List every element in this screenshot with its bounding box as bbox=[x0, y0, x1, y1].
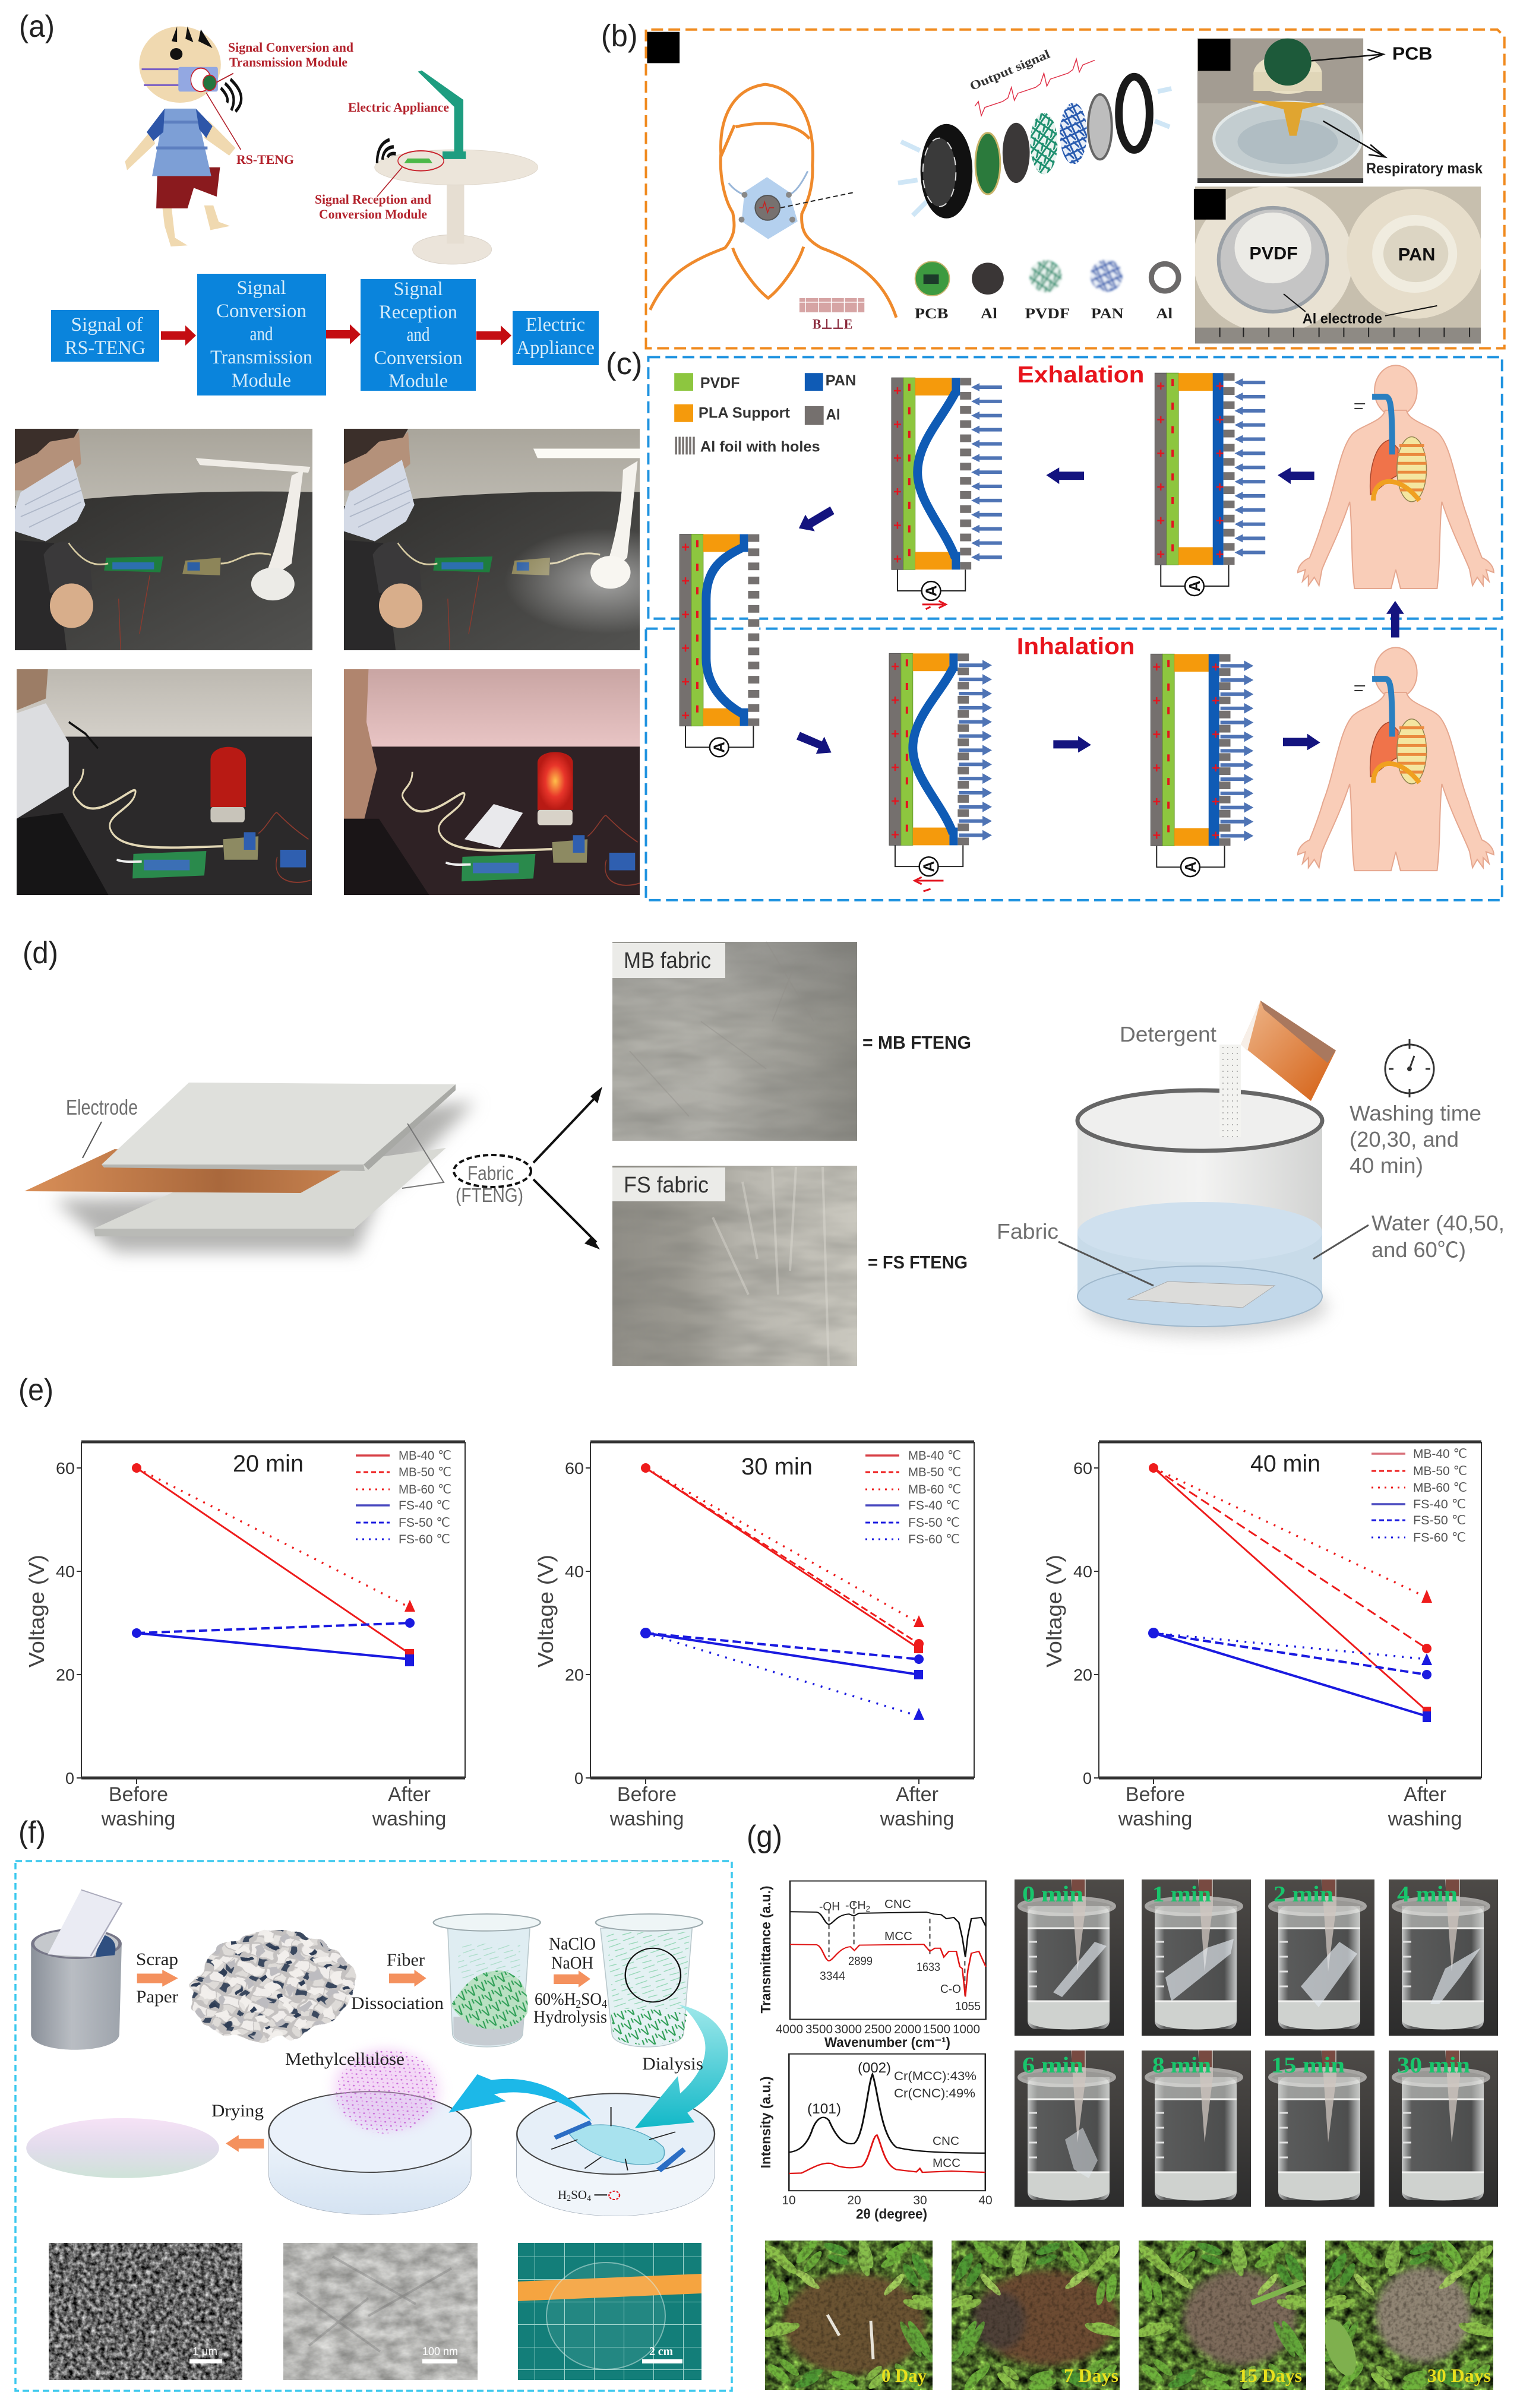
soil photo: 7 days bbox=[952, 2241, 1120, 2390]
washing time label: Washing time bbox=[1350, 1101, 1481, 1125]
photo: lamp off with mask bbox=[15, 429, 312, 650]
person outline with mask bbox=[650, 84, 896, 318]
SEM image: 1 μm bbox=[192, 2346, 217, 2358]
chart: 20 min: Before bbox=[109, 1783, 168, 1806]
chart legend bbox=[865, 1449, 961, 1546]
chart legend bbox=[356, 1449, 451, 1546]
exploded device view bbox=[898, 47, 1171, 219]
chart: 30 min: washing bbox=[880, 1808, 954, 1830]
chart legend: MB-40 ℃ bbox=[1413, 1447, 1467, 1461]
panel label e: (e) bbox=[18, 1373, 53, 1407]
process labels: Fiber bbox=[387, 1950, 425, 1970]
red module labels: Signal Conversion and bbox=[228, 40, 353, 55]
component legend: Al bbox=[1156, 306, 1173, 322]
FTIR chart: 4000 bbox=[776, 2023, 803, 2036]
chart legend: MB-50 ℃ bbox=[399, 1466, 451, 1479]
MB FTENG label: = MB FTENG bbox=[862, 1032, 971, 1053]
red module labels bbox=[228, 40, 449, 222]
university logo bbox=[799, 298, 864, 332]
process labels: Paper bbox=[136, 1987, 178, 2007]
panel d: fabric TENG and washing bbox=[23, 936, 1505, 1366]
fabric callout ellipse bbox=[454, 1155, 531, 1206]
chart: 40 min: 40 min bbox=[1250, 1451, 1320, 1477]
red module labels: Conversion Module bbox=[319, 207, 427, 222]
detergent label: Detergent bbox=[1120, 1022, 1216, 1046]
FTIR chart: -CH bbox=[845, 1899, 867, 1912]
process labels: Scrap bbox=[136, 1950, 178, 1969]
XRD chart: (002) bbox=[858, 2060, 891, 2076]
flow box: signal conversion and transmission module: Conversion bbox=[216, 300, 306, 322]
FTIR chart: 1500 bbox=[923, 2023, 950, 2036]
transparent film photo bbox=[518, 2243, 701, 2380]
process labels: 2 bbox=[576, 1998, 581, 2011]
flow box: signal reception and conversion module: Conversion bbox=[374, 347, 462, 369]
FTIR chart: 2 bbox=[865, 1904, 870, 1913]
XRD chart: 20 bbox=[847, 2194, 861, 2207]
chart: 20 min: After bbox=[388, 1783, 431, 1806]
chart: 20 min: washing bbox=[101, 1808, 175, 1830]
device: exhalation flat state bbox=[1155, 373, 1265, 596]
flow box: signal conversion and transmission module: Transmission bbox=[210, 347, 312, 368]
FS fabric photo bbox=[612, 1166, 857, 1366]
chart legend: MB-40 ℃ bbox=[908, 1449, 961, 1463]
device: exhalation deforming state: A bbox=[924, 586, 940, 596]
device: inhalation deforming state bbox=[889, 653, 992, 891]
flow box: signal reception and conversion module: Signal bbox=[393, 279, 443, 300]
orange dashed frame bbox=[646, 30, 1505, 349]
FTIR chart: CNC bbox=[884, 1898, 911, 1911]
soil photo: 30 days: 30 Days bbox=[1427, 2365, 1491, 2386]
panel b: respiratory mask TENG structure bbox=[601, 18, 1505, 349]
chart legend: MB-60 ℃ bbox=[399, 1483, 451, 1496]
component legend bbox=[915, 260, 1178, 322]
black redaction square bbox=[647, 32, 680, 63]
beaker photo: 8 min: 8 min bbox=[1152, 2053, 1211, 2078]
photo: PCB on respiratory mask bbox=[1197, 38, 1364, 183]
red module labels: Signal Reception and bbox=[315, 192, 431, 207]
chart: 20 min: 20 min bbox=[233, 1451, 304, 1477]
PCB and mask callouts: Respiratory mask bbox=[1366, 161, 1483, 177]
FTIR chart: 2500 bbox=[864, 2023, 892, 2036]
flow box: electric appliance: Electric bbox=[526, 314, 585, 336]
panel label b: (b) bbox=[601, 18, 638, 53]
device: exhalation flat state: A bbox=[1187, 581, 1203, 591]
output signal bbox=[968, 47, 1095, 116]
device: fully separated state bbox=[680, 534, 759, 757]
component legend: PCB bbox=[915, 306, 948, 322]
FTIR chart: 1633 bbox=[917, 1961, 940, 1974]
cartoon child wearing mask bbox=[125, 26, 241, 246]
flow box: electric appliance bbox=[513, 311, 599, 365]
inhalation heading: Inhalation bbox=[1017, 634, 1135, 659]
chart: 20 min: 20 bbox=[56, 1666, 75, 1684]
blue dashed frame: exhalation bbox=[648, 357, 1502, 619]
fabric label in beaker: Fabric bbox=[997, 1219, 1058, 1243]
panel label a: (a) bbox=[19, 10, 55, 44]
flow box: signal reception and conversion module: Reception bbox=[379, 302, 457, 323]
XRD chart: 2θ (degree) bbox=[856, 2206, 927, 2222]
water label: and 60℃) bbox=[1372, 1238, 1466, 1262]
process labels: NaOH bbox=[551, 1953, 593, 1973]
red module labels: Transmission Module bbox=[229, 55, 347, 69]
flow box: signal of RS-TENG: Signal of bbox=[71, 314, 143, 336]
blue dashed frame: inhalation bbox=[646, 629, 1502, 900]
orange process arrows bbox=[137, 1970, 590, 2152]
table with lamp and receiver bbox=[375, 71, 538, 264]
black redaction square bbox=[1194, 189, 1226, 220]
beaker photo: 6 min: 6 min bbox=[1022, 2053, 1083, 2078]
chart: 40 min: After bbox=[1404, 1783, 1446, 1806]
flow box: signal conversion and transmission module: Signal bbox=[236, 277, 286, 299]
university logo: B⊥⊥E bbox=[813, 317, 852, 332]
chart: 30 min: Before bbox=[617, 1783, 677, 1806]
FTIR chart: 2000 bbox=[894, 2023, 921, 2036]
beaker photo: 2 min: 2 min bbox=[1273, 1882, 1333, 1907]
soil photo: 30 days bbox=[1325, 2241, 1493, 2390]
FS fabric photo: FS fabric bbox=[624, 1173, 709, 1198]
beaker photo: 30 min bbox=[1389, 2051, 1498, 2207]
device: inhalation deforming state: A bbox=[921, 861, 938, 872]
panel label f: (f) bbox=[18, 1815, 46, 1850]
FTENG layered sheets bbox=[24, 1083, 475, 1252]
beaker photo: 8 min bbox=[1142, 2051, 1251, 2207]
beaker photo: 6 min bbox=[1015, 2051, 1124, 2207]
process labels: Dissociation bbox=[351, 1994, 444, 2013]
chart legend bbox=[1372, 1447, 1467, 1545]
FTIR chart: 1055 bbox=[955, 2000, 981, 2013]
panel label d: (d) bbox=[23, 936, 58, 970]
cyan curved arrow to dialysis bbox=[635, 2004, 728, 2128]
chart legend: FS-40 ℃ bbox=[1413, 1498, 1466, 1511]
water label bbox=[1313, 1211, 1505, 1262]
chart: 30 min: 20 bbox=[565, 1666, 584, 1684]
material legend bbox=[674, 373, 856, 455]
washing beaker bbox=[1077, 1090, 1328, 1336]
arrow bbox=[326, 324, 361, 344]
chart legend: FS-50 ℃ bbox=[1413, 1514, 1466, 1527]
human body: exhalation bbox=[1298, 365, 1494, 588]
chart legend: MB-50 ℃ bbox=[908, 1466, 961, 1479]
fabric callout ellipse: Fabric bbox=[467, 1162, 514, 1184]
dish with methylcellulose bbox=[268, 2035, 471, 2214]
beaker with fibers bbox=[434, 1914, 541, 2047]
electrode callouts: Al electrode bbox=[1303, 311, 1382, 327]
beaker with hydrolysed fibers bbox=[596, 1914, 703, 2047]
arrow bbox=[161, 325, 196, 346]
chart legend: FS-50 ℃ bbox=[908, 1516, 960, 1530]
device: inhalation flat state bbox=[1151, 654, 1253, 877]
chart: 40 min: Before bbox=[1126, 1783, 1185, 1806]
chart legend: FS-60 ℃ bbox=[399, 1533, 450, 1546]
soil photo: 7 days: 7 Days bbox=[1064, 2365, 1118, 2386]
fabric label in beaker bbox=[997, 1219, 1154, 1286]
material legend: Al bbox=[826, 407, 840, 423]
chart: 20 min: Voltage (V) bbox=[24, 1555, 49, 1667]
device: exhalation deforming state bbox=[892, 378, 1002, 609]
flow box: signal conversion and transmission module: Module bbox=[232, 370, 291, 391]
flow box: signal of RS-TENG bbox=[51, 310, 159, 362]
material legend: Al foil with holes bbox=[700, 439, 820, 455]
soil photo: 0 day: 0 Day bbox=[881, 2365, 927, 2386]
beaker photo: 30 min: 30 min bbox=[1397, 2053, 1470, 2078]
beaker photo: 1 min: 1 min bbox=[1152, 1882, 1211, 1907]
process arrows bbox=[797, 467, 1404, 754]
material legend: PLA Support bbox=[699, 406, 790, 422]
chart legend: FS-60 ℃ bbox=[1413, 1531, 1466, 1545]
process labels: 2 bbox=[567, 2194, 571, 2203]
beaker photo: 4 min bbox=[1389, 1879, 1498, 2036]
device: fully separated state: A bbox=[712, 742, 728, 753]
photo: beacon on without mask bbox=[344, 669, 640, 895]
process labels: Dialysis bbox=[642, 2054, 703, 2074]
beaker photo: 0 min: 0 min bbox=[1022, 1882, 1083, 1907]
red module labels: RS-TENG bbox=[236, 152, 294, 167]
PCB and mask callouts: PCB bbox=[1392, 43, 1432, 64]
XRD chart: 30 bbox=[913, 2194, 927, 2207]
XRD chart: Cr(CNC):49% bbox=[894, 2087, 975, 2100]
chart legend: FS-40 ℃ bbox=[399, 1499, 450, 1512]
FTIR chart: 2899 bbox=[848, 1955, 873, 1968]
process labels bbox=[136, 1934, 703, 2203]
panel label c: (c) bbox=[606, 346, 643, 381]
beaker photo: 15 min bbox=[1265, 2051, 1374, 2207]
chart: 30 min: 60 bbox=[565, 1459, 584, 1477]
flow box: signal reception and conversion module: Module bbox=[388, 371, 448, 392]
chart: 30 min: After bbox=[896, 1783, 938, 1806]
material legend: PAN bbox=[826, 373, 856, 389]
chart legend: FS-50 ℃ bbox=[399, 1516, 450, 1530]
flow box: signal reception and conversion module: and bbox=[406, 324, 430, 346]
transparent film photo: 2 cm bbox=[649, 2345, 673, 2358]
chart: 40 min: 20 bbox=[1073, 1666, 1092, 1684]
process labels: 60%H bbox=[535, 1989, 580, 2009]
electrode callouts: PVDF bbox=[1249, 243, 1298, 263]
black redaction square bbox=[1198, 39, 1231, 71]
chart: 40 min: washing bbox=[1118, 1808, 1192, 1830]
output signal: Output signal bbox=[968, 47, 1052, 93]
FTIR chart: 3500 bbox=[805, 2023, 833, 2036]
chart: 20 min: washing bbox=[372, 1808, 446, 1830]
exhalation heading: Exhalation bbox=[1017, 362, 1144, 388]
panel c: exhalation and inhalation mechanism bbox=[606, 346, 1502, 900]
XRD chart: MCC bbox=[933, 2157, 960, 2170]
FTIR chart: 3344 bbox=[820, 1970, 845, 1983]
XRD chart: CNC bbox=[933, 2135, 959, 2148]
arrow bbox=[476, 325, 511, 346]
chart legend: FS-60 ℃ bbox=[908, 1533, 960, 1546]
chart: 20 min bbox=[24, 1442, 465, 1830]
SEM image bbox=[49, 2243, 242, 2380]
beaker photo: 15 min: 15 min bbox=[1271, 2053, 1345, 2078]
paper flakes pile bbox=[191, 1930, 353, 2040]
chart: 40 min: Voltage (V) bbox=[1042, 1555, 1066, 1667]
FTIR chart: MCC bbox=[884, 1930, 912, 1943]
XRD chart: Cr(MCC):43% bbox=[894, 2070, 977, 2083]
electrode callouts bbox=[1249, 243, 1437, 327]
XRD chart: (101) bbox=[807, 2101, 841, 2117]
beaker photo: 1 min bbox=[1142, 1879, 1251, 2036]
FTIR chart: C-O bbox=[940, 1983, 961, 1996]
process labels: NaClO bbox=[549, 1934, 596, 1954]
chart: 30 min: washing bbox=[609, 1808, 684, 1830]
chart: 20 min: 40 bbox=[56, 1562, 75, 1581]
water label: Water (40,50, bbox=[1372, 1211, 1505, 1235]
TEM image bbox=[283, 2243, 478, 2380]
soil photo: 15 days: 15 Days bbox=[1238, 2365, 1302, 2386]
electrode label: Electrode bbox=[66, 1095, 138, 1119]
FTIR chart: Transmittance (a.u.) bbox=[758, 1886, 773, 2013]
chart legend: MB-60 ℃ bbox=[908, 1483, 961, 1496]
TEM image: 100 nm bbox=[422, 2346, 458, 2358]
process labels: Drying bbox=[211, 2101, 264, 2121]
panel f: scrap paper to cellulose film bbox=[15, 1815, 732, 2391]
chart: 30 min: 40 bbox=[565, 1562, 584, 1581]
flow box: signal reception and conversion module bbox=[361, 279, 476, 392]
FTIR chart: Wavenumber (cm⁻¹) bbox=[824, 2034, 950, 2050]
process labels: Methylcellulose bbox=[285, 2049, 405, 2069]
chart legend: MB-50 ℃ bbox=[1413, 1464, 1467, 1478]
beaker photo: 4 min: 4 min bbox=[1397, 1882, 1458, 1907]
chart: 40 min: 60 bbox=[1073, 1459, 1092, 1477]
flow box: signal conversion and transmission module: and bbox=[249, 324, 273, 345]
cyan dashed frame bbox=[15, 1861, 732, 2391]
component legend: PVDF bbox=[1025, 306, 1070, 322]
scrap paper cup bbox=[31, 1890, 122, 2050]
process labels: SO bbox=[581, 1989, 602, 2009]
panel label g: (g) bbox=[747, 1820, 782, 1854]
fabric callout ellipse: (FTENG) bbox=[456, 1184, 523, 1206]
FTIR chart: 1000 bbox=[953, 2023, 980, 2036]
detergent box and powder bbox=[1219, 1001, 1336, 1137]
component legend: PAN bbox=[1091, 306, 1124, 322]
process labels: 4 bbox=[602, 1998, 607, 2011]
chart: 40 min: 0 bbox=[1083, 1769, 1092, 1787]
chart: 30 min bbox=[533, 1442, 974, 1830]
FTIR chart: -OH bbox=[819, 1900, 840, 1913]
PCB and mask callouts bbox=[1312, 43, 1483, 177]
photo: PVDF and PAN electrodes bbox=[1195, 186, 1481, 343]
XRD chart: 40 bbox=[978, 2194, 993, 2207]
soil photo: 0 day bbox=[765, 2241, 933, 2390]
stopwatch icon bbox=[1385, 1039, 1434, 1097]
photo: beacon off with mask bbox=[17, 669, 312, 895]
FS FTENG label: = FS FTENG bbox=[868, 1252, 968, 1273]
dried film bbox=[26, 2118, 219, 2178]
chart legend: MB-60 ℃ bbox=[1413, 1481, 1467, 1495]
flow box: electric appliance: Appliance bbox=[516, 337, 595, 359]
washing time label: (20,30, and bbox=[1350, 1127, 1459, 1151]
process labels: SO bbox=[571, 2188, 587, 2202]
arrows to fabrics bbox=[533, 1087, 602, 1249]
chart: 20 min: 0 bbox=[65, 1769, 74, 1787]
MB fabric photo: MB fabric bbox=[624, 948, 711, 973]
washing time label: 40 min) bbox=[1350, 1153, 1423, 1178]
beaker photo: 0 min bbox=[1015, 1879, 1124, 2036]
chart: 30 min: 0 bbox=[574, 1769, 583, 1787]
human body: inhalation bbox=[1298, 647, 1494, 871]
XRD chart: 10 bbox=[782, 2194, 796, 2207]
chart: 20 min: 60 bbox=[56, 1459, 75, 1477]
FTIR chart: 3000 bbox=[835, 2023, 862, 2036]
device: inhalation flat state: A bbox=[1183, 862, 1199, 873]
process illustration bbox=[26, 1890, 728, 2216]
component legend: Al bbox=[981, 306, 997, 322]
dialysis dish bbox=[516, 2093, 715, 2216]
electrode callouts: PAN bbox=[1398, 245, 1435, 264]
electrode label bbox=[66, 1095, 138, 1158]
panel g: cellulose film characterisation and degradation bbox=[747, 1820, 1498, 2393]
FTIR chart bbox=[758, 1881, 986, 2050]
chart: 40 min bbox=[1042, 1442, 1481, 1830]
panel e: voltage before and after washing bbox=[18, 1373, 1481, 1830]
red module labels: Electric Appliance bbox=[348, 100, 449, 115]
soil photo: 15 days bbox=[1139, 2241, 1306, 2390]
material legend: PVDF bbox=[700, 375, 740, 391]
MB fabric photo bbox=[612, 942, 857, 1141]
XRD chart bbox=[758, 2054, 993, 2222]
chart legend: MB-40 ℃ bbox=[399, 1449, 451, 1463]
chart legend: FS-40 ℃ bbox=[908, 1499, 960, 1512]
process labels: 4 bbox=[587, 2194, 591, 2203]
photo: lamp on with mask bbox=[344, 429, 640, 650]
washing time label bbox=[1350, 1101, 1481, 1178]
panel a: RS-TENG signal system bbox=[15, 10, 704, 895]
chart: 30 min: 30 min bbox=[741, 1454, 813, 1480]
chart: 30 min: Voltage (V) bbox=[533, 1555, 558, 1667]
chart: 40 min: washing bbox=[1388, 1808, 1462, 1830]
flow box: signal conversion and transmission module bbox=[197, 274, 326, 395]
process labels: Hydrolysis bbox=[533, 2007, 607, 2027]
cyan curved arrow to methylcellulose dish bbox=[448, 2074, 592, 2121]
flow box: signal of RS-TENG: RS-TENG bbox=[65, 337, 146, 359]
XRD chart: Intensity (a.u.) bbox=[758, 2076, 773, 2169]
beaker photo: 2 min bbox=[1265, 1879, 1374, 2036]
chart: 40 min: 40 bbox=[1073, 1562, 1092, 1581]
process labels: H bbox=[558, 2188, 567, 2202]
